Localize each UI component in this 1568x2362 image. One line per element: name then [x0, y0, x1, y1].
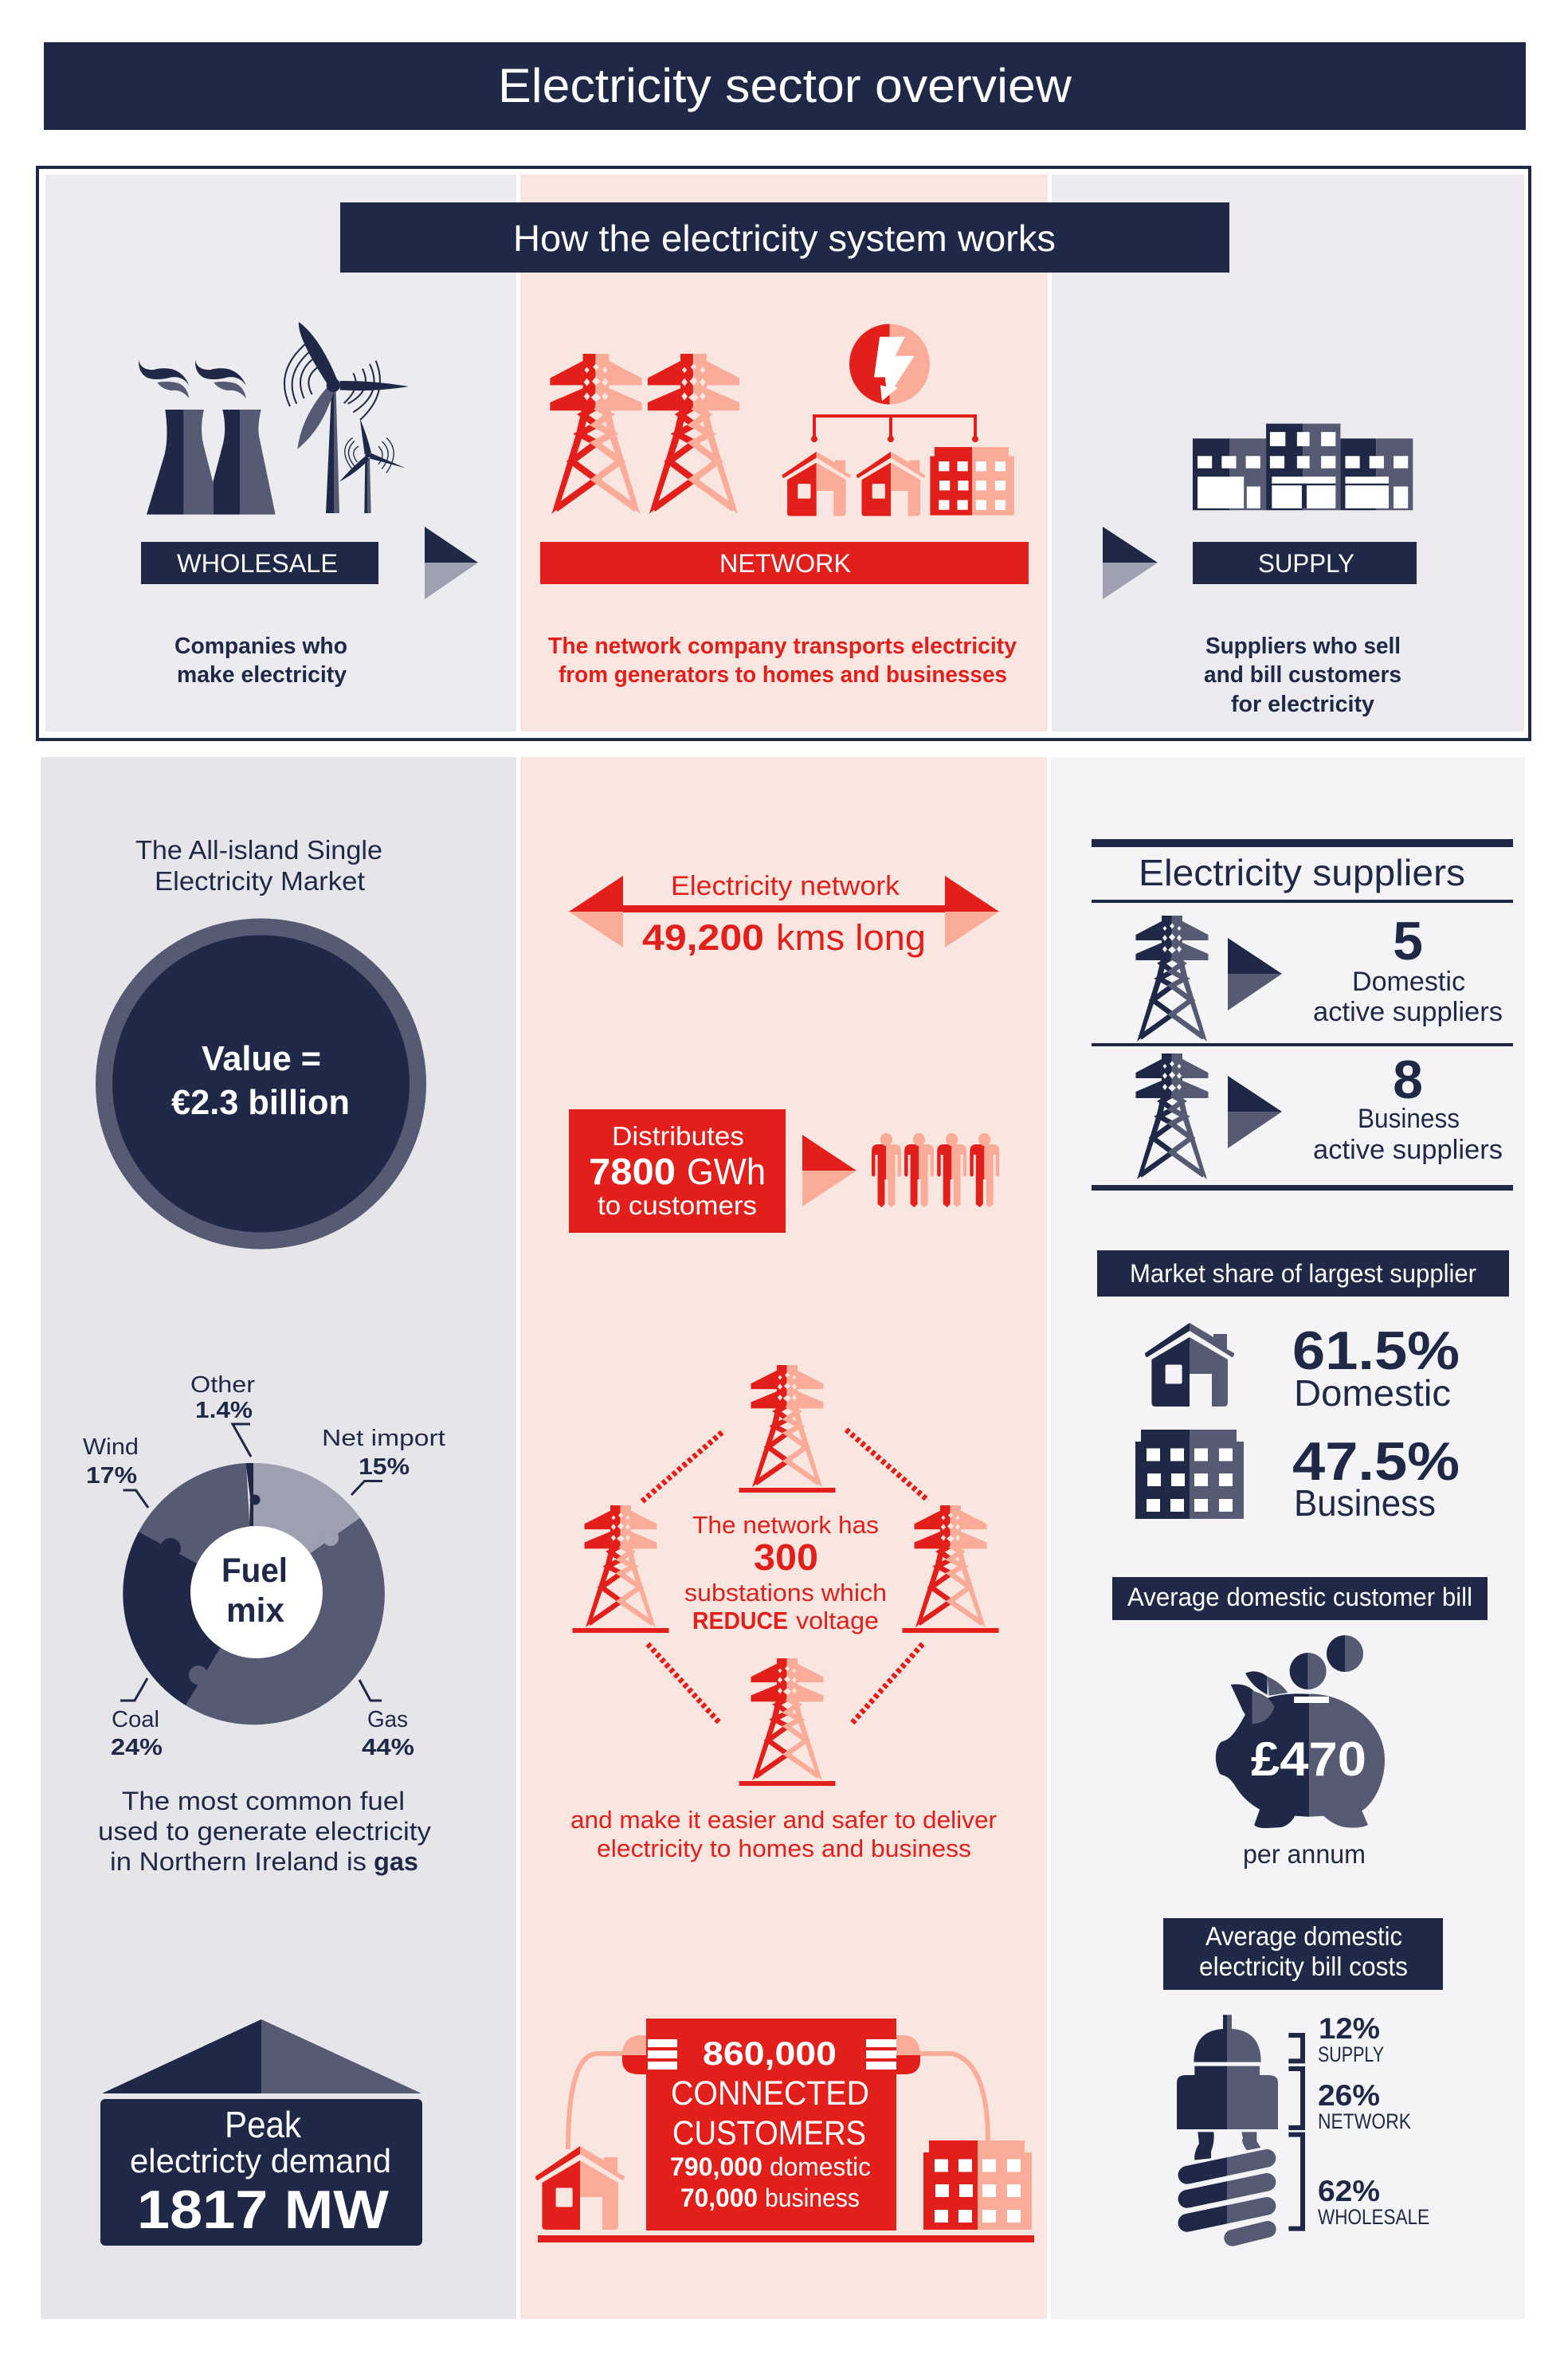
- text: substations: [684, 1511, 887, 1634]
- label: wholesale: WHOLESALE: [177, 549, 338, 578]
- heading: how the system works: [340, 202, 1229, 273]
- callout: connected customers with plugs: [568, 2019, 988, 2231]
- chart: fuel mix donut: [123, 1463, 385, 1724]
- brackets: bill cost shares: [1288, 2035, 1303, 2229]
- text: single electricity market: The All-island Single: [135, 835, 382, 865]
- text: supply description: for electricity: [1231, 692, 1374, 717]
- callout: market value circle: [96, 918, 426, 1250]
- text: supply description: [1204, 634, 1401, 717]
- heading: bill costs: [1163, 1918, 1443, 1990]
- heading: average bill: [1112, 1577, 1488, 1620]
- text: easier and safer: and make it easier and safer to deliver: [570, 1806, 997, 1834]
- callout: connected customers with plugs: CONNECTED: [671, 2074, 869, 2113]
- callout: peak demand house: Peak: [225, 2104, 302, 2145]
- text: substations: The network has: [692, 1511, 879, 1539]
- text: network length: kms long: [776, 917, 926, 958]
- label: supply: [1193, 542, 1417, 584]
- heading: market share: Market share of largest supplier: [1130, 1259, 1476, 1288]
- panel: market column: [41, 757, 516, 2319]
- icon: connected house: [535, 2146, 625, 2230]
- text: network length: [642, 871, 926, 958]
- labels: fuel mix segments: Other: [190, 1372, 255, 1398]
- labels: fuel mix segments: Wind: [83, 1434, 139, 1460]
- text: bill cost shares: SUPPLY: [1318, 2042, 1384, 2066]
- text: domestic suppliers: active suppliers: [1313, 997, 1503, 1027]
- text: single electricity market: [135, 835, 382, 896]
- text: network length: 49,200: [642, 917, 764, 958]
- text: per annum: per annum: [1243, 1839, 1366, 1869]
- callout: connected customers with plugs: 790,000: [670, 2152, 762, 2181]
- text: easier and safer: [570, 1806, 997, 1862]
- chart: fuel mix donut: Fuel: [221, 1552, 288, 1590]
- arrow: to customers: [802, 1135, 857, 1207]
- callout: connected customers with plugs: domestic: [770, 2152, 871, 2181]
- text: bill cost shares: 62%: [1318, 2175, 1380, 2207]
- heading: electricity suppliers: Electricity suppliers: [1139, 852, 1465, 893]
- text: business suppliers: 8: [1393, 1050, 1423, 1110]
- icon: domestic supplier pylon and arrow: [1136, 916, 1282, 1042]
- labels: fuel mix segments: 17%: [86, 1463, 137, 1489]
- callout: market value circle: €2.3 billion: [171, 1083, 350, 1122]
- text: bill cost shares: NETWORK: [1318, 2109, 1411, 2133]
- icon: business supplier pylon and arrow: [1136, 1053, 1282, 1179]
- diagram: substations pylons: [572, 1365, 999, 1786]
- text: business suppliers: active suppliers: [1313, 1135, 1503, 1165]
- icon: piggy bank: [1216, 1635, 1385, 1828]
- callout: market value circle: Value =: [202, 1039, 321, 1078]
- panel: how the electricity system works: [37, 167, 1530, 740]
- labels: fuel mix segments: [83, 1372, 445, 1760]
- text: domestic share: 61.5%: [1292, 1320, 1460, 1381]
- ground line: [538, 2235, 1034, 2242]
- icon: cooling towers and smoke: [139, 360, 276, 515]
- heading: how the system works: How the electricity system works: [513, 218, 1056, 259]
- labels: fuel mix segments: 15%: [359, 1454, 410, 1480]
- icon: light bulb: [1177, 2015, 1278, 2238]
- icon: house: [1145, 1323, 1234, 1407]
- label: network: NETWORK: [719, 549, 851, 578]
- text: domestic suppliers: 5: [1393, 911, 1423, 971]
- text: domestic share: [1292, 1320, 1460, 1414]
- arrow: network length: [569, 876, 999, 948]
- text: substations: REDUCE: [692, 1607, 788, 1634]
- heading: market share: [1097, 1250, 1509, 1297]
- callout: energy distributed: GWh: [687, 1151, 766, 1192]
- text: network description: [548, 634, 1017, 688]
- text: bill cost shares: WHOLESALE: [1318, 2205, 1429, 2229]
- panel: supply column: [1051, 757, 1525, 2319]
- text: wholesale description: Companies who: [174, 634, 347, 659]
- arrow: network to supply: [1103, 527, 1158, 599]
- text: supply description: and bill customers: [1204, 662, 1401, 688]
- text: most common fuel: The most common fuel: [122, 1787, 405, 1815]
- heading: average bill: Average domestic customer bill: [1127, 1583, 1472, 1611]
- icon: two pylons: [550, 354, 739, 514]
- icon: connected office: [923, 2140, 1032, 2230]
- text: easier and safer: electricity to homes and business: [597, 1834, 971, 1862]
- arrow: wholesale to network: [425, 527, 478, 599]
- callout: peak demand house: 1817 MW: [137, 2180, 390, 2240]
- icon: shops: [1193, 424, 1413, 510]
- callout: energy distributed: Distributes: [612, 1121, 744, 1151]
- label: network: [540, 542, 1029, 584]
- callout: energy distributed: to customers: [598, 1191, 757, 1220]
- label: wholesale: [141, 542, 378, 584]
- text: domestic suppliers: [1313, 911, 1503, 1027]
- icon: lightning bolt distribution to buildings: [782, 324, 1014, 516]
- text: business suppliers: Business: [1358, 1104, 1460, 1134]
- text: domestic share: Domestic: [1294, 1372, 1451, 1414]
- text: business share: Business: [1294, 1482, 1436, 1524]
- labels: fuel mix segments: 44%: [362, 1735, 414, 1760]
- text: wholesale description: [174, 634, 347, 688]
- text: business share: [1292, 1431, 1460, 1524]
- text: wholesale description: make electricity: [177, 662, 347, 688]
- text: bill cost shares: 12%: [1319, 2012, 1380, 2045]
- text: network length: Electricity network: [671, 871, 900, 901]
- text: substations: 300: [754, 1536, 818, 1578]
- text: business share: 47.5%: [1292, 1431, 1460, 1492]
- text: most common fuel: used to generate electricity: [98, 1817, 431, 1846]
- callout: connected customers with plugs: CUSTOMERS: [672, 2114, 866, 2152]
- icon: office: [1135, 1430, 1244, 1519]
- chart: fuel mix donut: mix: [226, 1591, 284, 1630]
- heading: bill costs: Average domestic: [1205, 1921, 1402, 1951]
- callout: connected customers with plugs: business: [765, 2183, 860, 2212]
- text: most common fuel: in Northern Ireland is: [110, 1847, 367, 1876]
- text: business suppliers: [1313, 1050, 1503, 1165]
- text: substations: substations which: [684, 1579, 887, 1607]
- text: most common fuel: [98, 1787, 431, 1876]
- icon: piggy bank: £470: [1251, 1732, 1366, 1786]
- callout: connected customers with plugs: 860,000: [703, 2034, 837, 2072]
- labels: fuel mix segments: 24%: [111, 1735, 163, 1760]
- text: network description: The network company transports electricity: [548, 634, 1017, 659]
- labels: fuel mix segments: Coal: [112, 1707, 159, 1732]
- text: substations: voltage: [796, 1607, 879, 1634]
- labels: fuel mix segments: Gas: [367, 1707, 408, 1732]
- text: bill cost shares: [1318, 2012, 1429, 2229]
- label: supply: SUPPLY: [1258, 549, 1354, 578]
- callout: energy distributed: 7800: [589, 1151, 676, 1192]
- callout: peak demand house: electricty demand: [130, 2142, 391, 2180]
- text: network description: from generators to homes and businesses: [559, 662, 1007, 688]
- icon: wind turbines: [284, 322, 409, 513]
- text: supply description: Suppliers who sell: [1205, 634, 1401, 659]
- title banner: Electricity sector overview: [498, 59, 1072, 112]
- callout: connected customers with plugs: 70,000: [680, 2183, 758, 2212]
- labels: fuel mix segments: Net import: [322, 1426, 445, 1451]
- callout: energy distributed: [569, 1109, 786, 1233]
- title banner: [44, 42, 1526, 130]
- text: domestic suppliers: Domestic: [1352, 967, 1465, 997]
- callout: peak demand house: [100, 2019, 422, 2246]
- panel: network column: [520, 757, 1047, 2319]
- text: single electricity market: Electricity Market: [155, 866, 365, 896]
- text: bill cost shares: 26%: [1318, 2079, 1380, 2112]
- heading: electricity suppliers: [1092, 839, 1513, 1191]
- text: most common fuel: gas: [374, 1847, 418, 1876]
- icon: customers: [872, 1133, 999, 1207]
- labels: fuel mix segments: 1.4%: [195, 1398, 253, 1423]
- heading: bill costs: electricity bill costs: [1199, 1952, 1408, 1981]
